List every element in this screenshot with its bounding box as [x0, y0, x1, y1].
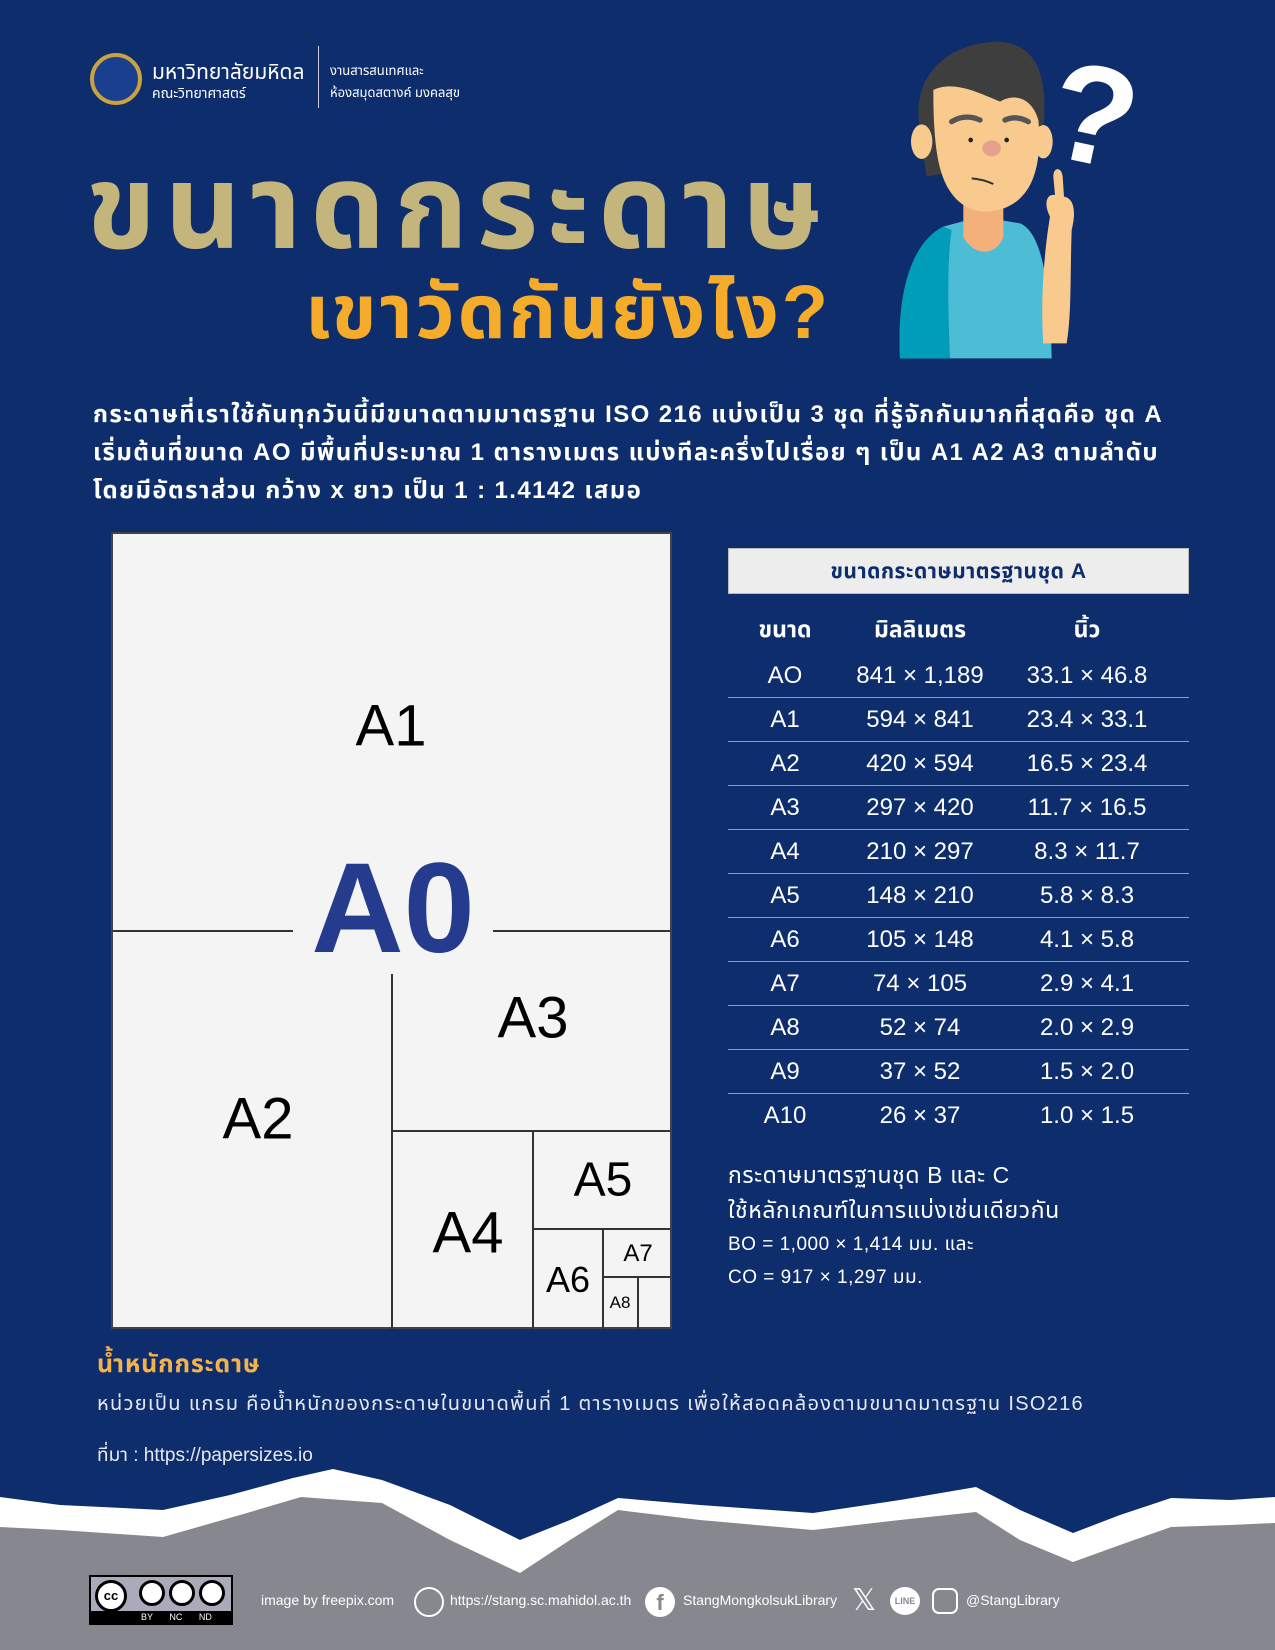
footer: license and social links: image by freepix.com — [261, 1592, 394, 1608]
text: 37 × 52 — [880, 1058, 960, 1085]
text: A1 — [770, 706, 800, 733]
text: 594 × 841 — [866, 706, 974, 733]
footer: license and social links: StangMongkolsukLibrary — [683, 1592, 837, 1608]
icon: CC BY-NC-ND badge: BY NC ND — [141, 1612, 212, 1622]
text: 5.8 × 8.3 — [1040, 882, 1134, 909]
label: A6: A6 — [546, 1259, 590, 1300]
text: paper weight description: หน่วยเป็น แกรม คือน้ำหนักของกระดาษในขนาดพื้นที่ 1 ตารางเมตร เพื่อให้สอดคล้องตามขนาดมาตรฐาน ISO216 — [97, 1393, 1084, 1415]
logo: Mahidol university — [90, 46, 460, 108]
text: A4 — [770, 838, 800, 865]
intro paragraph — [93, 397, 1163, 504]
intro paragraph: โดยมีอัตราส่วน กว้าง x ยาว เป็น 1 : 1.4142 เสมอ — [93, 477, 642, 504]
library name: ห้องสมุดสตางค์ มงคลสุข — [330, 85, 460, 100]
footer: license and social links — [89, 1575, 1060, 1625]
table header — [728, 548, 1189, 594]
note: B and C series — [728, 1162, 1060, 1288]
footer: license and social links: @StangLibrary — [966, 1592, 1060, 1608]
label: A2: A2 — [223, 1086, 293, 1152]
text: A10 — [764, 1102, 806, 1129]
text: 8.3 × 11.7 — [1034, 838, 1140, 865]
text: 23.4 × 33.1 — [1027, 706, 1147, 733]
intro paragraph: เริ่มต้นที่ขนาด AO มีพื้นที่ประมาณ 1 ตารางเมตร แบ่งทีละครึ่งไปเรื่อย ๆ เป็น A1 A2 A3 ตามลำดับ — [93, 439, 1159, 466]
source: ที่มา : https://papersizes.io — [97, 1445, 313, 1466]
text: A7 — [770, 970, 800, 997]
library name — [330, 63, 460, 100]
text: 26 × 37 — [880, 1102, 960, 1129]
label: A7: A7 — [623, 1240, 653, 1267]
label: A3: A3 — [498, 986, 568, 1050]
footer: license and social links: https://stang.sc.mahidol.ac.th — [450, 1592, 631, 1608]
text: 74 × 105 — [873, 970, 967, 997]
column headings: นิ้ว — [1074, 616, 1100, 642]
text: 105 × 148 — [866, 926, 974, 953]
text: 148 × 210 — [866, 882, 974, 909]
subtitle: เขาวัดกันยังไง? — [305, 270, 831, 355]
icon: LINE: LINE — [895, 1596, 915, 1606]
library name: งานสารสนเทศและ — [330, 63, 424, 78]
text: 210 × 297 — [866, 838, 974, 865]
heading: paper weight: น้ำหนักกระดาษ — [97, 1350, 260, 1378]
icon: CC BY-NC-ND badge — [89, 1575, 233, 1625]
text: 11.7 × 16.5 — [1028, 794, 1146, 821]
text: A9 — [770, 1058, 800, 1085]
university name: มหาวิทยาลัยมหิดล — [152, 61, 304, 84]
text: 52 × 74 — [880, 1014, 960, 1041]
label: A8: A8 — [610, 1293, 630, 1312]
icon: LINE — [890, 1587, 920, 1615]
text: A8 — [770, 1014, 800, 1041]
note: B and C series: ใช้หลักเกณฑ์ในการแบ่งเช่นเดียวกัน — [728, 1197, 1060, 1223]
text: 841 × 1,189 — [856, 662, 984, 689]
question mark: ? — [1036, 30, 1152, 201]
label: A0: A0 — [311, 837, 475, 980]
icon: X: 𝕏 — [852, 1584, 876, 1617]
diagram: A-series paper subdivision — [111, 532, 672, 1329]
column headings: ขนาด — [758, 616, 812, 642]
intro paragraph: กระดาษที่เราใช้กันทุกวันนี้มีขนาดตามมาตรฐาน ISO 216 แบ่งเป็น 3 ชุด ที่รู้จักกันมากที่สุดคือ ชุด A — [93, 401, 1163, 428]
column headings — [758, 614, 1100, 642]
label: A5: A5 — [574, 1154, 632, 1206]
note: B and C series: กระดาษมาตรฐานชุด B และ C — [728, 1162, 1010, 1188]
text: 1.0 × 1.5 — [1040, 1102, 1134, 1129]
icon: university seal — [90, 53, 142, 105]
icon: facebook — [645, 1587, 675, 1617]
text: 2.9 × 4.1 — [1040, 970, 1134, 997]
text: 4.1 × 5.8 — [1040, 926, 1134, 953]
icon: globe — [414, 1587, 444, 1617]
text: 2.0 × 2.9 — [1040, 1014, 1134, 1041]
table header: ขนาดกระดาษมาตรฐานชุด A — [830, 560, 1086, 583]
icon: instagram — [932, 1588, 958, 1614]
text: AO — [768, 662, 802, 689]
table: A series sizes — [728, 548, 1189, 642]
text: A2 — [770, 750, 800, 777]
torn paper footer background — [0, 1469, 1275, 1650]
note: B and C series: BO = 1,000 × 1,414 มม. และ — [728, 1234, 974, 1255]
column headings: มิลลิเมตร — [874, 616, 966, 642]
label: A4: A4 — [433, 1200, 503, 1266]
icon: facebook: f — [656, 1590, 664, 1615]
note: B and C series: CO = 917 × 1,297 มม. — [728, 1267, 923, 1288]
text: 297 × 420 — [866, 794, 974, 821]
title: ขนาดกระดาษ — [86, 142, 831, 274]
text: A5 — [770, 882, 800, 909]
logo: Mahidol university: คณะวิทยาศาสตร์ — [152, 85, 246, 101]
illustration: confused man — [900, 30, 1152, 358]
text: 16.5 × 23.4 — [1027, 750, 1147, 777]
text: 420 × 594 — [866, 750, 974, 777]
icon: CC BY-NC-ND badge: cc — [104, 1588, 118, 1603]
text: 33.1 × 46.8 — [1027, 662, 1147, 689]
text: A3 — [770, 794, 800, 821]
label: A1: A1 — [356, 694, 426, 758]
text: 1.5 × 2.0 — [1040, 1058, 1134, 1085]
text: A6 — [770, 926, 800, 953]
